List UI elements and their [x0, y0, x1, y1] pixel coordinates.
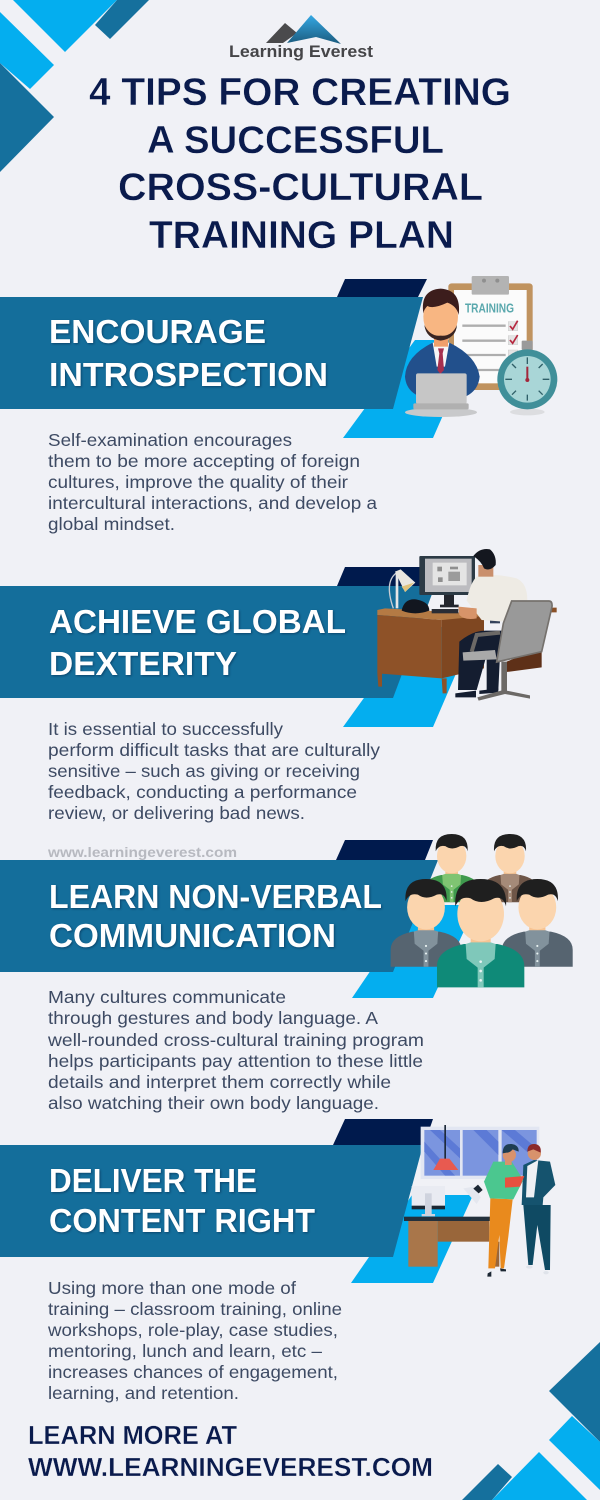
panel: encourage introspection — [0, 276, 557, 534]
panel: deliver the content right — [0, 1119, 555, 1403]
text block: achieve global dexterity: perform difficult tasks that are culturally — [48, 740, 380, 760]
text block: learn non-verbal communication: helps participants pay attention to these little — [48, 1051, 423, 1071]
heading: learn non-verbal communication — [49, 879, 382, 955]
text block: deliver the content right: training – classroom training, online — [48, 1299, 342, 1319]
panel: achieve global dexterity — [0, 549, 557, 823]
text block: achieve global dexterity: feedback, conducting a performance — [48, 782, 357, 802]
text block: deliver the content right: workshops, role-play, case studies, — [47, 1320, 338, 1340]
icon: two colleagues in an office — [404, 1125, 555, 1277]
text block: learn non-verbal communication: well-rounded cross-cultural training program — [47, 1030, 424, 1050]
title: A SUCCESSFUL — [147, 119, 444, 162]
heading: achieve global dexterity: DEXTERITY — [49, 646, 237, 683]
heading: deliver the content right: CONTENT RIGHT — [49, 1203, 316, 1240]
logo: Learning Everest — [229, 15, 373, 61]
text block: learn non-verbal communication: Many cultures communicate — [48, 987, 286, 1007]
text block: encourage introspection: intercultural interactions, and develop a — [48, 493, 377, 513]
heading: achieve global dexterity: ACHIEVE GLOBAL — [49, 604, 346, 641]
icon: man with laptop, training clipboard and stopwatch — [405, 276, 557, 417]
decoration: top-left geometric shapes — [0, 0, 149, 172]
text block: achieve global dexterity: It is essential to successfully — [48, 719, 283, 739]
text block: deliver the content right: increases chances of engagement, — [48, 1362, 338, 1382]
text block: achieve global dexterity: sensitive – such as giving or receiving — [48, 761, 360, 781]
decoration: bottom-right geometric shapes — [462, 1342, 600, 1500]
text block: deliver the content right: learning, and retention. — [48, 1383, 239, 1403]
heading: deliver the content right: DELIVER THE — [49, 1163, 257, 1200]
footer call to action — [28, 1420, 433, 1482]
panel: learn non-verbal communication — [0, 834, 573, 1113]
icon: man with laptop, training clipboard and stopwatch: TRAINING — [465, 300, 514, 315]
text block: learn non-verbal communication: also watching their own body language. — [48, 1093, 379, 1113]
text block: learn non-verbal communication: through gestures and body language. A — [48, 1008, 378, 1028]
icon: man working at desk — [377, 549, 557, 701]
text block: learn non-verbal communication: details and interpret them correctly while — [48, 1072, 391, 1092]
text block: deliver the content right: mentoring, lunch and learn, etc – — [48, 1341, 322, 1361]
text block: encourage introspection: Self-examination encourages — [48, 430, 292, 450]
heading: learn non-verbal communication: COMMUNICATION — [49, 918, 336, 955]
text block: learn non-verbal communication — [47, 987, 424, 1113]
heading: deliver the content right — [49, 1163, 316, 1240]
text block: deliver the content right: Using more than one mode of — [48, 1278, 296, 1298]
text block: achieve global dexterity — [48, 719, 380, 823]
title: 4 TIPS FOR CREATING — [89, 71, 511, 114]
text block: encourage introspection: cultures, improve the quality of their — [48, 472, 348, 492]
title: TRAINING PLAN — [149, 214, 454, 257]
text block: encourage introspection: global mindset. — [48, 514, 175, 534]
footer call to action: WWW.LEARNINGEVEREST.COM — [28, 1452, 433, 1482]
text block: encourage introspection: them to be more accepting of foreign — [48, 451, 360, 471]
title: CROSS-CULTURAL — [118, 166, 483, 209]
heading: encourage introspection: INTROSPECTION — [49, 357, 328, 394]
logo: Learning Everest: Learning Everest — [229, 42, 373, 61]
text block: deliver the content right — [47, 1278, 342, 1403]
text block: encourage introspection — [48, 430, 377, 534]
footer call to action: LEARN MORE AT — [28, 1420, 237, 1450]
icon: group of five people — [391, 834, 573, 987]
heading: learn non-verbal communication: LEARN NON-VERBAL — [49, 879, 382, 916]
heading: encourage introspection: ENCOURAGE — [49, 314, 266, 351]
title — [89, 71, 511, 257]
watermark url: www.learningeverest.com — [47, 844, 237, 860]
heading: achieve global dexterity — [49, 604, 346, 683]
heading: encourage introspection — [49, 314, 328, 394]
text block: achieve global dexterity: review, or delivering bad news. — [48, 803, 305, 823]
